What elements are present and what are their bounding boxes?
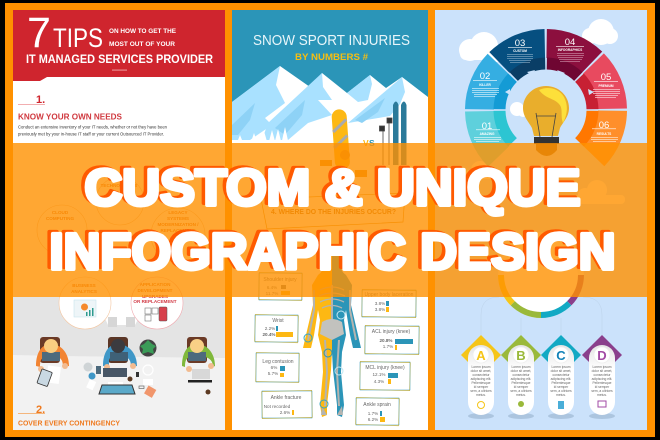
circle labels: TECHNOLOGIES xyxy=(101,183,137,188)
stat: upper body laceration: 3.8% xyxy=(375,307,385,312)
icon: app modules xyxy=(145,307,167,321)
person: middle worker xyxy=(103,337,137,370)
option A: dolor sit amet, xyxy=(471,369,491,373)
gear notch cutouts xyxy=(505,70,594,95)
orange overlay band xyxy=(5,143,655,297)
circle labels: SYSTEMS xyxy=(167,216,189,221)
option C: Pellentesque xyxy=(551,381,571,385)
segment 03 xyxy=(507,38,533,63)
donut inner ring xyxy=(480,44,612,176)
circle labels: LEGACY xyxy=(168,210,188,215)
stat: ACL: ACL injury (knee) xyxy=(372,329,411,335)
option B: adipiscing elit. xyxy=(511,377,531,381)
stat: ankle sprain xyxy=(356,397,399,426)
option C: sem, a ultrices xyxy=(550,389,572,393)
option D: consectetur xyxy=(593,373,611,377)
option D: metus. xyxy=(597,393,607,397)
stat: ankle sprain: Ankle sprain xyxy=(363,402,391,408)
infographic ring xyxy=(484,218,598,332)
tip 2 xyxy=(18,404,120,428)
panel: circular bulb diagram xyxy=(435,10,647,430)
segment 03: CUSTOM xyxy=(513,49,527,53)
clouds xyxy=(459,19,618,117)
tip 1: 1. xyxy=(36,94,45,106)
option B: Pellentesque xyxy=(511,381,531,385)
stat: ankle fracture: 2.6% xyxy=(280,410,290,415)
stat: ankle fracture: Ankle fracture xyxy=(271,395,302,401)
person: left worker xyxy=(36,337,69,372)
circle labels: REPLACEMENT xyxy=(161,228,196,233)
segment 01: AMAZING xyxy=(480,132,495,136)
option A: Lorem ipsum xyxy=(471,365,491,369)
stat: ankle sprain: 1.7% xyxy=(368,411,378,416)
segment 06: RESULTS xyxy=(597,132,611,136)
circle labels: BUSINESS xyxy=(72,283,96,288)
tips title: TIPS xyxy=(53,23,103,53)
snow subtitle: BY NUMBERS # xyxy=(295,52,368,62)
option A: sem, a ultrices xyxy=(470,389,492,393)
desk items xyxy=(84,362,156,398)
circle labels: COMPUTING xyxy=(46,216,74,221)
option B: id semper xyxy=(514,385,529,389)
stat: upper body laceration xyxy=(362,289,416,318)
option C: metus. xyxy=(556,393,566,397)
option B: dolor sit amet, xyxy=(511,369,531,373)
red header xyxy=(13,10,225,81)
stat: wrist: Wrist xyxy=(272,318,284,324)
circle labels: APPLICATION xyxy=(140,282,171,287)
tip 1: previously met by your in-house IT staff or your current Outsourced IT Provider. xyxy=(18,132,164,136)
option D: sem, a ultrices xyxy=(591,389,613,393)
option A: adipiscing elit. xyxy=(471,377,491,381)
tips title: 7 xyxy=(27,9,51,57)
VS label xyxy=(363,138,375,148)
tips title: IT MANAGED SERVICES PROVIDER xyxy=(26,54,214,66)
stat: wrist xyxy=(255,314,298,343)
option C: id semper xyxy=(554,385,569,389)
option B: B xyxy=(516,348,526,363)
tips title: MOST OUT OF YOUR xyxy=(109,41,175,48)
option D xyxy=(582,335,622,415)
person: right worker xyxy=(182,337,215,394)
stat: wrist: 20.4% xyxy=(262,332,276,337)
stat: ACL xyxy=(365,325,419,355)
title line 1: CUSTOM & UNIQUE xyxy=(84,159,580,216)
tip 1 xyxy=(18,94,167,136)
white backdrop between circles xyxy=(95,297,150,325)
panel: snow sport injuries xyxy=(232,10,428,430)
VS label: S xyxy=(369,138,375,148)
stat: MCL xyxy=(360,361,410,391)
circle labels: DEVELOPMENT xyxy=(138,288,173,293)
stat: leg contusion xyxy=(256,352,299,383)
option D: Lorem ipsum xyxy=(592,365,612,369)
donut segments xyxy=(452,16,640,204)
segment 04: 04 xyxy=(565,37,575,48)
option D: dolor sit amet, xyxy=(592,369,612,373)
option A: consectetur xyxy=(472,373,490,377)
joint markers xyxy=(304,311,345,408)
segment 01: 01 xyxy=(482,121,492,132)
card shadows xyxy=(468,413,615,419)
table xyxy=(13,355,225,430)
segment 02: KILLER xyxy=(479,83,491,87)
segment 02: 02 xyxy=(480,71,490,82)
option B xyxy=(501,335,541,415)
option B: consectetur xyxy=(512,373,530,377)
stat: wrist: 2.2% xyxy=(265,326,275,331)
option C xyxy=(541,335,581,415)
option A: Pellentesque xyxy=(471,381,491,385)
tip 1: KNOW YOUR OWN NEEDS xyxy=(18,112,123,122)
option C: dolor sit amet, xyxy=(551,369,571,373)
band clouds xyxy=(465,161,625,204)
stat: shoulder: 6.4% xyxy=(267,285,277,290)
tip 2: COVER EVERY CONTINGENCY xyxy=(18,418,120,428)
option C: Lorem ipsum xyxy=(551,365,571,369)
option D: id semper xyxy=(595,385,610,389)
segment 04: INFOGRAPHICS xyxy=(558,48,582,52)
stat: shoulder xyxy=(259,272,302,301)
skis xyxy=(393,102,406,165)
circle labels xyxy=(46,183,199,304)
panel: IT tips xyxy=(13,9,225,430)
plant xyxy=(140,340,156,356)
option D: adipiscing elit. xyxy=(592,377,612,381)
option B: Lorem ipsum xyxy=(511,365,531,369)
misc sport gear xyxy=(320,150,367,185)
segment 05: 05 xyxy=(601,72,611,83)
segment 04 xyxy=(556,37,584,62)
papers and tablet xyxy=(37,365,61,387)
option A: metus. xyxy=(476,393,486,397)
option C: C xyxy=(556,348,566,363)
mountains xyxy=(232,66,428,170)
skeleton xyxy=(308,285,356,415)
stat: ACL: 1.7% xyxy=(383,344,393,349)
technology circles xyxy=(37,177,205,329)
option B: metus. xyxy=(516,393,526,397)
stat: leg contusion: 5.7% xyxy=(268,371,278,376)
segment 02 xyxy=(472,71,499,97)
tips title: ON HOW TO GET THE xyxy=(109,28,177,35)
option D: D xyxy=(597,348,607,363)
stat: ankle fracture: Not recorded xyxy=(264,404,291,409)
stat: ankle sprain: 6.2% xyxy=(368,417,378,422)
segment 03: 03 xyxy=(515,38,525,49)
icon: analytics dashboard xyxy=(74,300,96,317)
stat: MCL: 4.3% xyxy=(374,379,384,384)
option A xyxy=(461,335,501,415)
main title xyxy=(46,157,616,280)
title line 2: INFOGRAPHIC DESIGN xyxy=(46,221,612,278)
option B: sem, a ultrices xyxy=(510,389,532,393)
segment 05 xyxy=(593,72,620,98)
stat: shoulder: 11.7% xyxy=(266,291,278,296)
option A: id semper xyxy=(474,385,489,389)
injury heading box: 4. WHERE DO THE INJURIES OCCUR? xyxy=(271,209,396,216)
stat: upper body laceration: 3.8% xyxy=(375,301,385,306)
stat: MCL: MCL injury (knee) xyxy=(365,365,405,371)
circle labels: UPGRADES xyxy=(142,294,168,299)
stat: MCL: 12.1% xyxy=(372,372,386,377)
circle labels: OR REPLACEMENT xyxy=(133,299,177,304)
snow title: SNOW SPORT INJURIES xyxy=(253,32,410,49)
circle labels: CLOUD xyxy=(52,210,69,215)
segment labels xyxy=(472,37,620,142)
segment 01 xyxy=(474,121,501,142)
stat: leg contusion: 6% xyxy=(271,365,277,370)
stat: ACL: 20.8% xyxy=(379,338,393,343)
segment 06: 06 xyxy=(599,120,609,131)
panel gutters xyxy=(5,143,655,297)
stat: ankle fracture xyxy=(262,390,312,419)
segment 06 xyxy=(591,120,618,142)
office floor xyxy=(13,297,225,358)
option C: adipiscing elit. xyxy=(551,377,571,381)
icon: light bulb xyxy=(523,86,569,156)
ski poles xyxy=(380,118,392,165)
stat: upper body laceration: Upper body laceration xyxy=(365,292,414,298)
title line 2: INFOGRAPHIC DESIGN xyxy=(50,223,616,280)
trees xyxy=(236,127,289,145)
stat: leg contusion: Leg contusion xyxy=(262,359,294,365)
option A: A xyxy=(476,348,486,363)
VS label: V xyxy=(363,138,369,148)
segment 05: PREMIUM xyxy=(598,84,614,88)
stat: shoulder: Shoulder injury xyxy=(263,277,297,283)
option D: Pellentesque xyxy=(592,381,612,385)
snowboard xyxy=(331,109,351,170)
injury heading box xyxy=(261,193,405,229)
stat boxes xyxy=(255,272,419,426)
option C: consectetur xyxy=(552,373,570,377)
circle labels: MODERNIZATION / xyxy=(157,222,199,227)
body figure xyxy=(303,248,361,417)
title line 1: CUSTOM & UNIQUE xyxy=(81,157,577,214)
circle labels: ANALYTICS xyxy=(71,289,97,294)
tip 1: Conduct an extensive inventory of your IT needs, whether or not they have been xyxy=(18,124,167,130)
tips title xyxy=(26,9,214,71)
connector lines xyxy=(481,297,602,335)
tip 2: 2. xyxy=(36,404,45,416)
